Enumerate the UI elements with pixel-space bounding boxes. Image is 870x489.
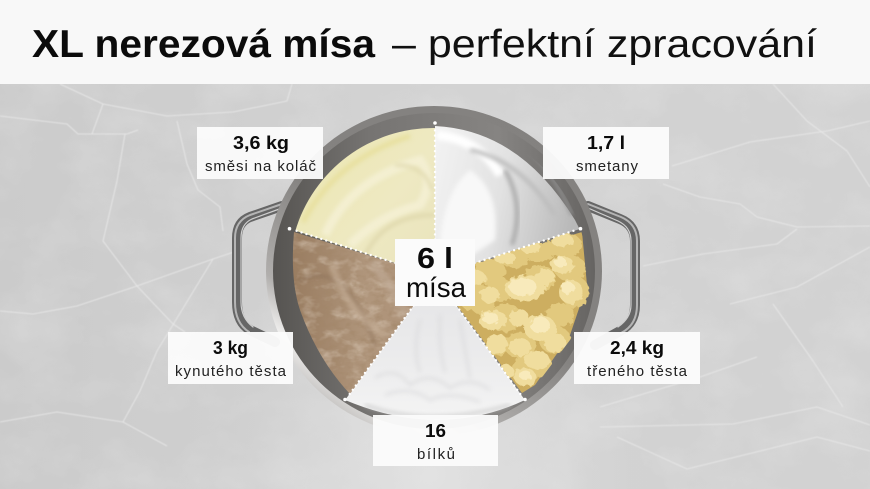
label: egg whites: bílků	[417, 446, 455, 463]
callout: bowl capacity	[395, 239, 475, 306]
label: cake batter	[197, 127, 323, 179]
header band	[0, 0, 870, 84]
label: egg whites	[373, 415, 498, 466]
segment: whipped cream	[435, 126, 579, 263]
callout: bowl capacity: mísa	[406, 272, 466, 303]
segment: yeast dough	[292, 232, 413, 394]
icon: bowl handles	[235, 204, 637, 345]
label: creamed dough: třeného těsta	[587, 363, 688, 380]
label: egg whites: 16	[425, 421, 446, 441]
label: yeast dough	[168, 332, 293, 384]
label: creamed dough: 2,4 kg	[610, 338, 664, 358]
label: yeast dough: 3 kg	[213, 338, 248, 358]
label: cream: 1,7 l	[587, 133, 625, 153]
label: cake batter: směsi na koláč	[205, 158, 316, 175]
segment: egg whites	[346, 306, 524, 415]
segment: cake batter	[296, 128, 435, 263]
dotted segment dividers	[288, 121, 582, 401]
title	[32, 23, 817, 66]
label: cream: smetany	[576, 158, 638, 175]
label: cake batter: 3,6 kg	[233, 133, 289, 153]
callout: bowl capacity: 6 l	[417, 243, 453, 275]
label: yeast dough: kynutého těsta	[175, 363, 287, 380]
label: creamed dough	[574, 332, 700, 384]
bowl body	[266, 106, 602, 436]
label: cream	[543, 127, 669, 179]
segment: crumble dough	[458, 232, 590, 393]
title: – perfektní zpracování	[392, 23, 817, 66]
title: XL nerezová mísa	[32, 23, 375, 66]
